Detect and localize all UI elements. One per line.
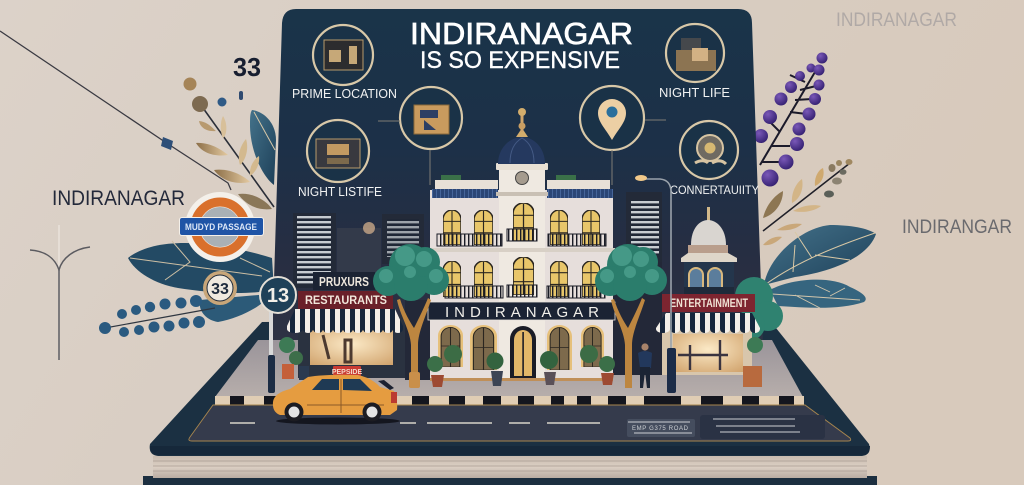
left lower leaf [128, 241, 274, 322]
metro roundel sign: MUDYD PASSAGE [185, 222, 257, 232]
icon: map [400, 87, 462, 149]
pole sign 13: 13 [267, 285, 289, 307]
car: PEPSIDE [332, 369, 362, 376]
building sign: INDIRANAGAR [445, 304, 599, 321]
title: INDIRANAGAR [410, 16, 633, 51]
potted plants [427, 345, 615, 387]
floor band [428, 248, 615, 252]
icon: night life [666, 24, 724, 82]
subtitle: IS SO EXPENSIVE [420, 47, 620, 74]
metro roundel sign [179, 192, 264, 262]
curb [215, 396, 804, 405]
road marking panels: EMP G375 ROAD [632, 426, 689, 432]
badge 33 [203, 271, 237, 305]
roof and dome tower [432, 108, 613, 380]
label: left Indiranagar: INDIRANAGAR [52, 187, 185, 210]
road marking panels [627, 415, 825, 439]
awning [656, 313, 760, 333]
middle windows [443, 257, 605, 298]
awning [287, 309, 403, 333]
left upper branch with leaves [184, 78, 276, 209]
right temple dome building [681, 207, 737, 295]
planter [743, 337, 763, 387]
ground floor arches [438, 325, 604, 378]
car [273, 366, 400, 424]
right: golden sprig [763, 159, 852, 245]
dark background panel [272, 9, 763, 345]
label: night life: NIGHT LIFE [659, 86, 730, 100]
right: blue leaves [764, 225, 876, 308]
left decoration: power line and pole [0, 31, 231, 360]
left dotted sprig [99, 295, 215, 337]
street lamp [635, 175, 676, 393]
label: connectivity: CONNERTAUIITY [670, 185, 759, 197]
person [638, 343, 652, 388]
number 33: 33 [233, 52, 261, 82]
upper windows [437, 203, 606, 246]
left tree [373, 244, 449, 388]
sidewalk [215, 340, 803, 397]
sign: entertainment: ENTERTAINMENT [670, 298, 748, 310]
icon: prime location [313, 25, 373, 85]
right: label: INDIRANGAR [902, 217, 1012, 238]
connector: right [612, 120, 666, 185]
pole sign 13 [260, 277, 296, 393]
right entertainment shop [656, 294, 763, 387]
right: faded label: INDIRANAGAR [836, 10, 957, 31]
dark gaps between buildings [405, 262, 662, 380]
background city buildings [293, 192, 662, 288]
title [410, 16, 633, 74]
label: night listife: NIGHT LISTIFE [298, 185, 382, 199]
right: purple berry branch [754, 52, 828, 186]
sign: luxury: PRUXURS [319, 275, 369, 289]
sign: restaurants: RESTAURANTS [305, 293, 387, 307]
connector: left [378, 121, 430, 185]
planters left [279, 337, 309, 380]
icon: connectivity [680, 121, 738, 179]
icon: location pin [580, 86, 644, 150]
label: prime location: PRIME LOCATION [292, 87, 397, 101]
right tree [595, 244, 667, 388]
main building [428, 108, 615, 381]
road [189, 405, 851, 441]
right bush [735, 277, 783, 340]
badge 33: 33 [211, 281, 229, 298]
icon: night listife [307, 120, 369, 182]
book base with pages [143, 318, 877, 485]
left restaurant [287, 272, 405, 378]
